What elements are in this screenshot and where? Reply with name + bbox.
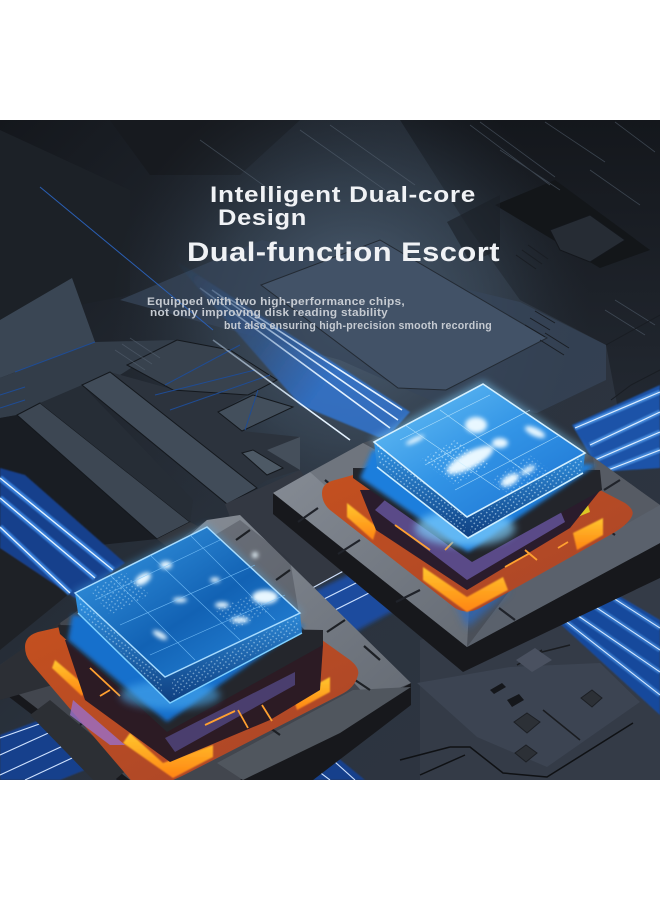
chip 1 circuit layers <box>58 615 323 762</box>
title <box>187 182 500 267</box>
chip 1: left stack <box>0 515 411 790</box>
chip 2 circuit layers <box>353 450 602 590</box>
blue light streaks <box>0 187 660 780</box>
streak: chip 2 right <box>572 385 660 472</box>
heading: Intelligent Dual-core Design: Design <box>218 205 307 230</box>
body text: Equipped with two high-performance chips, <box>147 296 405 308</box>
body text: not only improving disk reading stability <box>150 307 389 319</box>
streak: upper left to right chip <box>40 187 410 440</box>
streak: bottom center <box>313 759 365 780</box>
streak: chip 2 lower right <box>561 596 660 715</box>
artwork panel <box>0 120 660 790</box>
heading: Dual-function Escort: Dual-function Escort <box>187 237 500 267</box>
streak: lower left <box>0 718 85 780</box>
body text <box>147 296 492 332</box>
streak: upper left of left chip <box>0 468 125 598</box>
chip 2: right stack <box>273 380 660 672</box>
body text: but also ensuring high-precision smooth recording <box>224 320 492 332</box>
heading: Intelligent Dual-core Design: Intelligent Dual-core <box>210 182 476 207</box>
chip 2 substrate <box>273 434 660 672</box>
streak: between chips <box>313 571 393 632</box>
chip 1 glass block <box>72 524 303 703</box>
chip 2 glass block <box>370 380 590 538</box>
heading: Intelligent Dual-core Design <box>210 182 476 230</box>
chip 1 orange frame <box>25 627 358 785</box>
background: circuit board <box>0 120 660 780</box>
chip 2 orange frame <box>322 475 633 612</box>
infographic canvas <box>0 120 660 780</box>
chip 1 substrate <box>0 515 411 790</box>
